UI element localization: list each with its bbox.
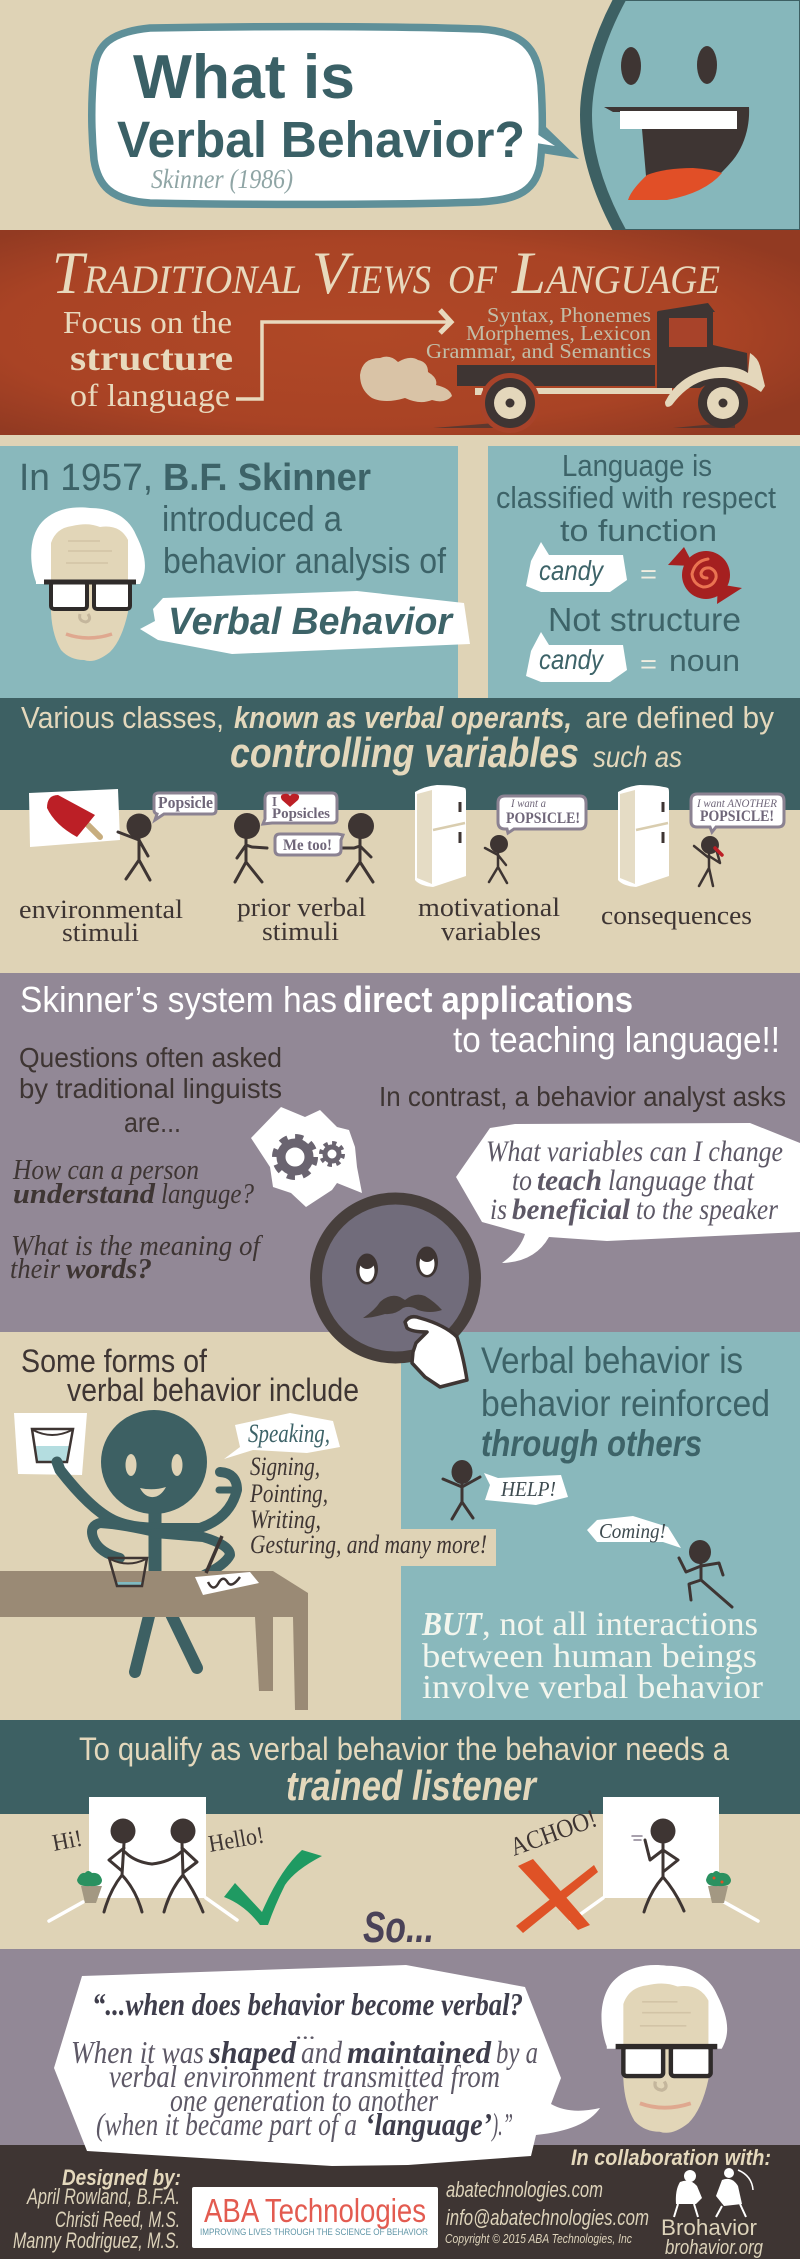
speech bubble: Skinner quote: by a [496, 2034, 538, 2070]
stick figure sneezing [632, 1818, 684, 1912]
panel: forms of verbal behavior [0, 1332, 496, 1720]
callout: candy equals candy icon: candy [539, 555, 605, 586]
speech bubble: behavior analyst question: language that [608, 1164, 755, 1197]
bubble: I want a popsicle [498, 796, 586, 833]
text: designed by [13, 2165, 181, 2253]
speech bubble: Skinner quote: “...when does behavior become verbal? [92, 1986, 523, 2022]
example: prior verbal stimuli [234, 793, 374, 946]
text: verbal behavior is reinforced: Verbal behavior is [481, 1340, 743, 1381]
text: in 1957 B.F. Skinner: In 1957, [19, 457, 153, 499]
citation: Skinner (1986) [151, 164, 293, 194]
scene: sneeze without a listener [506, 1797, 758, 1933]
card with glass [14, 1413, 87, 1475]
bubble: help: HELP! [500, 1477, 556, 1501]
smiling face character [586, 0, 800, 235]
speech bubble: Skinner quote: one generation to another [170, 2082, 438, 2118]
bubble: coming [587, 1516, 681, 1548]
panel: function not structure [488, 446, 800, 698]
text: designed by: April Rowland, B.F.A. [26, 2184, 180, 2209]
arrow: structure to list [236, 310, 451, 399]
beige patch behind text [401, 1529, 496, 1566]
text: not structure: Not structure [548, 601, 741, 638]
text: in 1957 B.F. Skinner: B.F. Skinner [163, 457, 371, 499]
bubble: I want another popsicle: POPSICLE! [700, 808, 774, 825]
text: focus on the structure of language: Focus on the [63, 304, 232, 340]
text: various classes: known as verbal operants, [234, 700, 572, 735]
label: prior verbal stimuli [237, 893, 366, 946]
speech bubble: Skinner quote: and [301, 2034, 343, 2070]
text: syntax list: Morphemes, Lexicon [466, 321, 652, 345]
speech: hi and hello: Hi! [50, 1826, 85, 1857]
icon: orange cross [516, 1859, 598, 1933]
text: language is classified: to function [560, 513, 717, 548]
icon: plant with berries [706, 1871, 731, 1903]
list: forms of verbal behavior: Signing, [250, 1452, 320, 1481]
text: syntax list [426, 303, 652, 363]
paper and pen [195, 1536, 259, 1595]
icon: truck [433, 303, 765, 433]
speech bubble: behavior analyst question: beneficial [512, 1193, 631, 1226]
list: forms of verbal behavior: Pointing, [249, 1479, 328, 1508]
text: linguist questions: their [10, 1253, 61, 1285]
bubble: I want another popsicle [691, 794, 784, 832]
label: motivational variables [418, 893, 560, 946]
header section [92, 0, 800, 235]
heading: traditional views of language: T [52, 240, 87, 306]
text: contact details: Copyright © 2015 ABA Technologies, Inc [445, 2231, 632, 2246]
panel: direct applications [0, 973, 800, 1332]
speech bubble: behavior analyst question: is [490, 1193, 507, 1226]
text: verbal behavior is reinforced [481, 1340, 770, 1464]
icon: smoke puff [360, 357, 452, 402]
bubble: speaking [224, 1413, 340, 1459]
text: some forms of verbal behavior: Some forms of [21, 1343, 207, 1379]
text: contact details: abatechnologies.com [446, 2177, 603, 2202]
text: syntax list: Grammar, and Semantics [426, 339, 651, 363]
heading: traditional views of language: OF [448, 257, 498, 302]
doorway [49, 1797, 237, 1921]
text: in 1957 B.F. Skinner: introduced a [162, 498, 343, 539]
text: focus on the structure of language: structure [70, 338, 233, 378]
title [117, 43, 525, 168]
footer: credits [13, 2145, 771, 2259]
text: syntax list: Syntax, Phonemes [487, 303, 651, 327]
text: focus on the structure of language: of language [70, 377, 230, 413]
multi-armed character [57, 1410, 237, 1672]
example: motivational variables [415, 785, 586, 946]
text: in collaboration with: In collaboration with: [571, 2145, 771, 2170]
text: to qualify as verbal behavior: To qualify as verbal behavior the behavior needs a [79, 1731, 729, 1767]
heading: traditional views of language [52, 240, 720, 306]
text: designed by: Christi Reed, M.S. [55, 2207, 180, 2232]
speech bubble: Skinner quote: ‘language’ [365, 2106, 492, 2142]
heading: traditional views of language: ANGUAGE [543, 257, 720, 302]
speech bubble: Skinner quote [54, 1965, 600, 2166]
text: but not all interactions: between human beings [422, 1638, 757, 1675]
speech bubble: behavior analyst question: teach [537, 1164, 602, 1197]
text: various classes: are defined by [585, 700, 774, 735]
bubble: coming: Coming! [599, 1519, 666, 1543]
panel: trained listener band [0, 1720, 800, 1814]
table [0, 1571, 308, 1710]
icon: fridge [618, 785, 669, 887]
text: designed by: Designed by: [62, 2165, 181, 2190]
text: questions asked by linguists: Questions often asked [19, 1042, 282, 1073]
stick figures shaking hands [104, 1818, 203, 1912]
title speech bubble [92, 27, 579, 204]
text: contact details: info@abatechnologies.com [446, 2205, 649, 2230]
text: but not all interactions: BUT [421, 1606, 483, 1643]
callout: candy equals noun [526, 632, 740, 682]
speech: achoo: ACHOO! [506, 1804, 601, 1862]
logo: Brohavior: Brohavior [661, 2215, 757, 2240]
callout: Verbal Behavior [140, 591, 470, 654]
bubble: I want a popsicle: I want a [510, 796, 546, 810]
text: questions asked by linguists [19, 1042, 282, 1138]
text: linguist questions: words? [66, 1253, 152, 1285]
callout: Verbal Behavior: Verbal Behavior [168, 601, 454, 643]
text: linguist questions [10, 1154, 264, 1285]
heading: trained listener: trained listener [286, 1762, 538, 1809]
text: various classes: Various classes, [21, 700, 224, 735]
bubble: I love popsicles [263, 793, 337, 824]
icon: plant [77, 1871, 102, 1903]
scene: greeting with a listener [49, 1797, 322, 1925]
icon: popsicle card [29, 789, 120, 847]
bubble: me too [275, 834, 343, 855]
label: motivational variables: motivational [418, 893, 560, 922]
text: questions asked by linguists: are... [124, 1107, 181, 1138]
logo: ABA Technologies: ABA Technologies [204, 2192, 426, 2229]
bubble: popsicle [154, 793, 216, 820]
stick figure eating popsicle [694, 836, 722, 886]
text: but not all interactions: involve verbal behavior [422, 1669, 764, 1706]
callout: candy equals noun: noun [669, 643, 740, 678]
example: environmental stimuli [19, 789, 216, 947]
speech bubble: Skinner quote: shaped [208, 2034, 297, 2070]
heading: direct applications: direct applications [343, 979, 633, 1020]
text: contact details [445, 2177, 649, 2246]
title: What is [133, 43, 355, 112]
speech: hi and hello [50, 1823, 266, 1858]
heading: traditional views of language: V [312, 240, 354, 306]
icon: candy [668, 547, 742, 604]
logo: Brohavior [661, 2168, 763, 2259]
icon: Skinner head [601, 1965, 727, 2133]
logo: ABA Technologies: IMPROVING LIVES THROUGH THE SCIENCE OF BEHAVIOR [200, 2227, 428, 2238]
heading: direct applications: Skinner’s system has [20, 979, 337, 1020]
text: questions asked by linguists: by traditional linguists [19, 1073, 282, 1104]
speech bubble: behavior analyst question: to the speaker [636, 1193, 778, 1226]
two stick figures talking [234, 813, 374, 882]
icon: fridge [415, 785, 466, 887]
stick figure calling for help [443, 1460, 480, 1519]
text: linguist questions: languge? [161, 1178, 254, 1210]
text: language is classified: Language is [562, 448, 712, 483]
text: some forms of verbal behavior [21, 1343, 359, 1408]
glass on table [109, 1558, 147, 1587]
title: Verbal Behavior? [117, 111, 525, 168]
bubble: I love popsicles: I [272, 795, 277, 810]
speech: hi and hello: Hello! [207, 1823, 266, 1858]
heading: traditional views of language: IEWS [347, 257, 431, 302]
speech bubble: Skinner quote: When it was [71, 2034, 204, 2070]
label: environmental stimuli [19, 895, 183, 947]
character: thinking face with moustache [316, 1198, 475, 1387]
example: consequences [601, 785, 784, 930]
speech bubble: Skinner quote: maintained [347, 2034, 492, 2070]
bubble: me too: Me too! [283, 837, 332, 854]
callout: candy equals candy icon [526, 542, 657, 592]
text: in 1957 B.F. Skinner [19, 457, 447, 581]
bubble: popsicle: Popsicle [158, 793, 213, 812]
callout: candy equals noun: = [640, 649, 657, 679]
logo: Brohavior: brohavior.org [665, 2237, 763, 2259]
heading: controlling variables: such as [593, 741, 682, 774]
stick figure running [679, 1540, 732, 1607]
list: forms of verbal behavior [249, 1452, 487, 1559]
panel: traditional views of language [0, 230, 800, 435]
bubble: I want another popsicle: I want ANOTHER [696, 796, 778, 810]
list: forms of verbal behavior: Gesturing, and many more! [250, 1530, 487, 1559]
label: motivational variables: variables [441, 917, 541, 946]
stick figure small [485, 835, 508, 883]
text: various classes [21, 700, 774, 735]
panel: reinforced through others [401, 1332, 800, 1720]
heading: traditional views of language: L [511, 240, 546, 306]
list: forms of verbal behavior: Writing, [250, 1505, 321, 1534]
panel: when does behavior become verbal [0, 1949, 800, 2259]
stick figure pointing [118, 814, 152, 880]
text: but not all interactions [421, 1606, 764, 1706]
text: linguist questions: How can a person [12, 1154, 199, 1186]
bubble: help [484, 1473, 568, 1505]
speech bubble: Skinner quote: (when it became part of a [96, 2106, 357, 2142]
text: designed by: Manny Rodriguez, M.S. [13, 2228, 180, 2253]
speech bubble: behavior analyst question: to [512, 1164, 532, 1197]
label: prior verbal stimuli: prior verbal [237, 893, 366, 922]
text: some forms of verbal behavior: verbal behavior include [67, 1372, 359, 1408]
footer background [0, 2145, 800, 2259]
logo: ABA Technologies [192, 2187, 438, 2248]
heading: controlling variables: controlling variables [230, 729, 579, 776]
icon: Skinner head [31, 507, 145, 661]
speech bubble: Skinner quote: verbal environment transmitted from [109, 2058, 500, 2094]
text: in 1957 B.F. Skinner: behavior analysis of [163, 540, 447, 581]
label: environmental stimuli: stimuli [62, 918, 139, 947]
thought bubble with gears [251, 1107, 362, 1207]
heading: direct applications: to teaching language!! [453, 1019, 780, 1060]
text: language is classified [496, 448, 776, 548]
speech bubble: Skinner quote: ... [296, 2019, 316, 2044]
text: verbal behavior is reinforced: behavior reinforced [481, 1383, 770, 1424]
label: consequences: consequences [601, 901, 752, 930]
bubble: I want a popsicle: POPSICLE! [506, 810, 580, 827]
text: linguist questions: What is the meaning of [11, 1230, 264, 1262]
text: verbal behavior is reinforced: through others [481, 1423, 702, 1464]
text: language is classified: classified with respect [496, 480, 776, 515]
heading: direct applications [20, 979, 780, 1060]
icon: green check [224, 1850, 322, 1925]
speech bubble: Skinner quote: ).” [491, 2106, 513, 2142]
callout: candy equals noun: candy [539, 644, 605, 675]
bubble: speaking: Speaking, [248, 1419, 330, 1448]
text: focus on the structure of language [63, 304, 233, 413]
label: environmental stimuli: environmental [19, 895, 183, 924]
label: prior verbal stimuli: stimuli [262, 917, 339, 946]
doorway [571, 1797, 758, 1921]
speech bubble: behavior analyst question [456, 1123, 800, 1263]
panel: verbal operants band [0, 698, 800, 810]
heading: so: So... [363, 1903, 434, 1952]
text: but not all interactions: , not all interactions [482, 1606, 758, 1643]
callout: candy equals candy icon: = [640, 559, 657, 589]
bubble: I love popsicles: Popsicles [272, 806, 330, 822]
panel: Skinner 1957 [0, 446, 470, 698]
heading: traditional views of language: RADITIONAL [83, 257, 302, 302]
text: linguist questions: understand [13, 1178, 156, 1210]
